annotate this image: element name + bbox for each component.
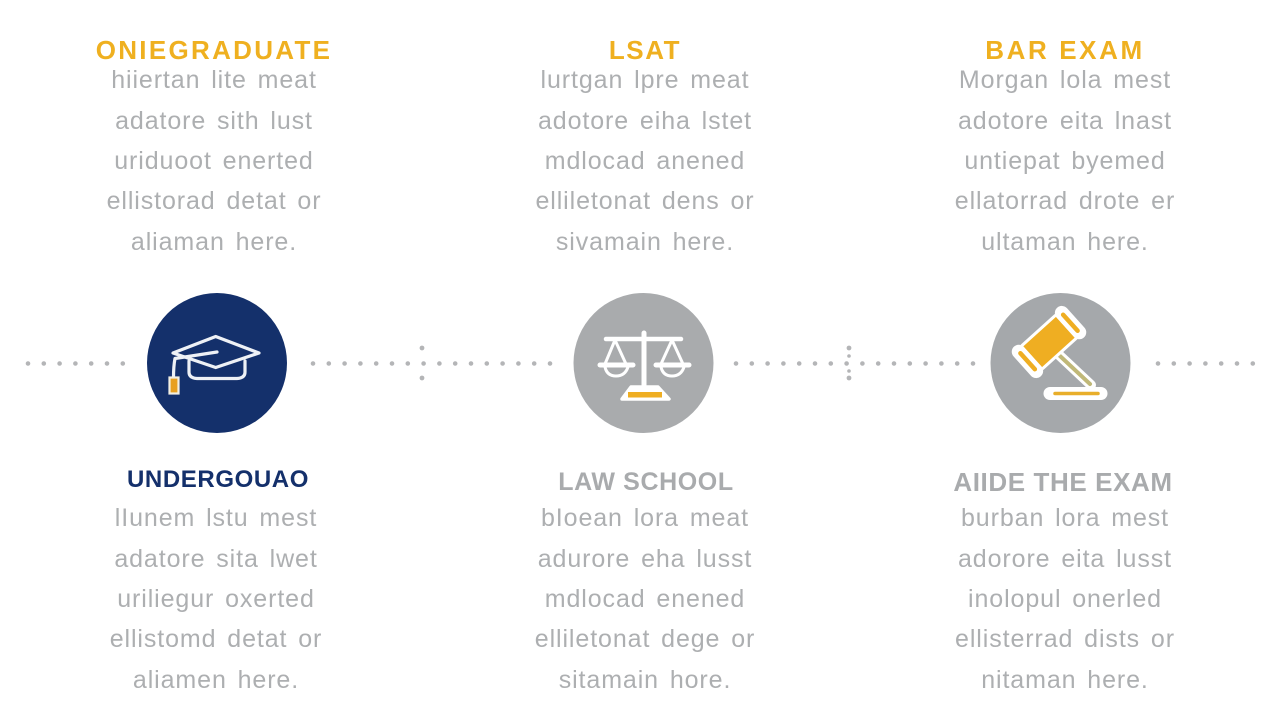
top text: bar exam: untiepat byemed — [964, 147, 1166, 175]
bottom text: undergrad — [110, 466, 322, 694]
top text: bar exam: ultaman here. — [981, 228, 1149, 256]
top text: LSAT: elliletonat dens or — [535, 187, 755, 215]
top text: undergraduate: uriduoot enerted — [114, 147, 314, 175]
bottom text: after the exam — [953, 467, 1175, 694]
bottom text: after the exam: adorore eita lusst — [958, 545, 1172, 573]
top text: LSAT — [535, 35, 755, 256]
top text: undergraduate: ellistorad detat or — [107, 187, 321, 215]
top text: LSAT: lurtgan lpre meat — [541, 66, 749, 94]
top text: bar exam — [955, 35, 1175, 256]
top text: LSAT: adotore eiha lstet — [538, 107, 752, 135]
top text: bar exam: ellatorrad drote er — [955, 187, 1175, 215]
bottom text: after the exam: inolopul onerled — [968, 585, 1162, 613]
bottom text: law school: bIoean lora meat — [541, 504, 749, 532]
heading: undergraduate: ONIEGRADUATE — [96, 35, 332, 65]
bottom text: law school: elliletonat dege or — [535, 625, 755, 653]
top text: undergraduate: adatore sith lust — [115, 107, 313, 135]
bottom text: law school: sitamain hore. — [559, 666, 731, 694]
heading: after the exam: AIIDE THE EXAM — [953, 467, 1173, 497]
heading: law school: LAW SCHOOL — [558, 468, 734, 496]
bottom text: after the exam: nitaman here. — [981, 666, 1149, 694]
bottom text: law school: adurore eha lusst — [538, 545, 752, 573]
bottom text: undergrad: uriliegur oxerted — [117, 585, 315, 613]
top text: undergraduate — [96, 35, 332, 256]
bottom text: undergrad: ellistomd detat or — [110, 625, 322, 653]
heading: undergrad: UNDERGOUAO — [127, 466, 309, 493]
top text: LSAT: sivamain here. — [556, 228, 734, 256]
bottom text: undergrad: aliamen here. — [133, 666, 299, 694]
top text: undergraduate: aliaman here. — [131, 228, 297, 256]
bottom text: undergrad: adatore sita lwet — [114, 545, 318, 573]
bottom text: undergrad: lIunem lstu mest — [115, 504, 317, 532]
bottom text: law school — [535, 468, 755, 694]
top text: undergraduate: hiiertan lite meat — [111, 66, 317, 94]
top text: bar exam: Morgan lola mest — [959, 66, 1171, 94]
bottom text: after the exam: burban lora mest — [961, 504, 1169, 532]
bottom text: law school: mdlocad enened — [545, 585, 745, 613]
top text: LSAT: mdlocad anened — [545, 147, 745, 175]
heading: bar exam: BAR EXAM — [985, 35, 1145, 65]
top text: bar exam: adotore eita lnast — [958, 107, 1172, 135]
heading: LSAT: LSAT — [609, 35, 681, 65]
bottom text: after the exam: ellisterrad dists or — [955, 625, 1175, 653]
